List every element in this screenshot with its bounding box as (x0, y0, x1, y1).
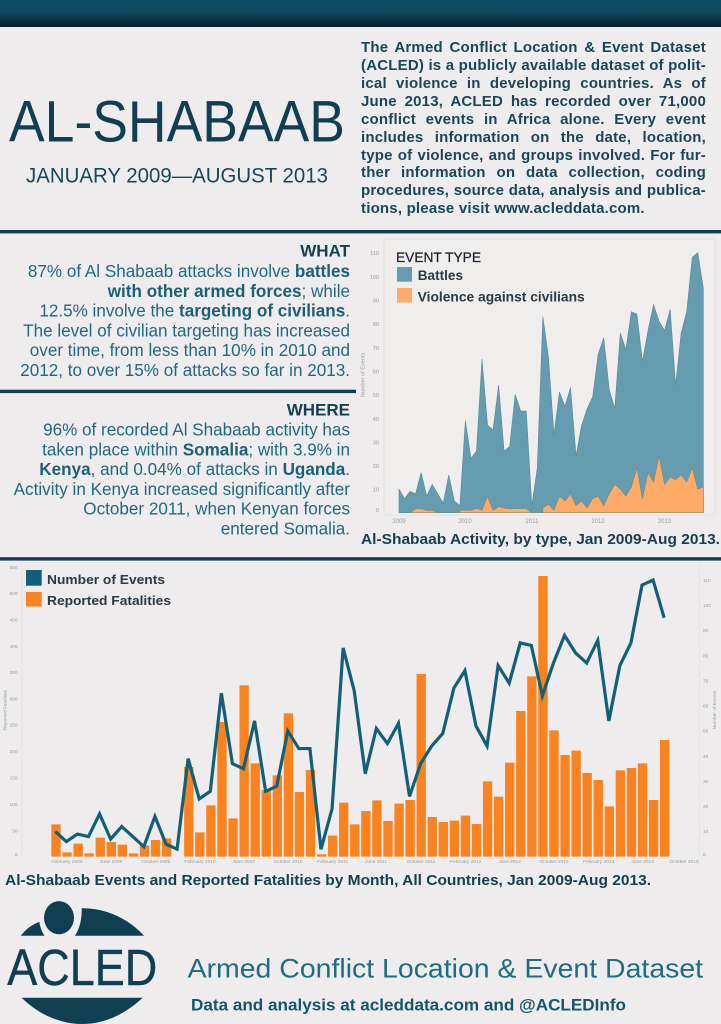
axis labels: 60 (373, 370, 379, 376)
month labels: October 2011 (407, 859, 436, 865)
left axis labels: 100 (9, 802, 18, 808)
area chart: activity by type: 2012 (591, 519, 605, 525)
title: AL-SHABAAB (9, 90, 345, 154)
month labels: June 2009 (100, 859, 123, 865)
axis labels (370, 251, 379, 514)
text block: about ACLED: type of violence, and groups involved. For fur- (361, 147, 706, 164)
left axis labels: 250 (9, 722, 18, 728)
legend: event type (396, 249, 585, 304)
text block: what: 2012, to over 15% of attacks so far in 2013. (20, 361, 350, 380)
axis labels: 110 (370, 251, 379, 257)
month labels: February 2011 (317, 859, 348, 865)
left axis labels: 150 (9, 776, 18, 782)
text block: about ACLED: tions, please visit www.acleddata.com. (361, 200, 645, 217)
left axis labels: 200 (9, 749, 18, 755)
footer: organisation name: Armed Conflict Location & Event Dataset (188, 953, 704, 983)
text block: about ACLED: procedures, source data, analysis and publica- (361, 182, 706, 199)
legend: events and fatalities: Number of Events (47, 572, 165, 587)
text block: where: taken place within Somalia; with 3.9% in (42, 440, 350, 459)
text block: where: Kenya, and 0.04% of attacks in Uganda. (39, 460, 350, 479)
text block: about ACLED (361, 39, 706, 217)
month labels: June 2010 (232, 859, 255, 865)
area chart: activity by type: 2010 (458, 519, 472, 525)
month labels: June 2012 (498, 859, 521, 865)
text block: what (20, 241, 351, 380)
month labels: June 2013 (631, 859, 654, 865)
area chart: activity by type: 2009 (392, 519, 406, 525)
axis labels: 50 (373, 393, 379, 399)
month labels: February 2009 (51, 859, 83, 865)
text block: what: with other armed forces; while (107, 282, 350, 301)
area: violence against civilians (410, 456, 703, 513)
month labels: October 2009 (141, 859, 171, 865)
left axis labels: 550 (9, 565, 18, 571)
area chart: activity by type: Number of Events (360, 352, 366, 397)
area chart: activity by type: 2013 (658, 519, 672, 525)
text block: where: WHERE (287, 401, 350, 420)
month labels: June 2011 (365, 859, 387, 865)
left axis labels: 400 (9, 644, 18, 650)
left axis labels: 50 (12, 828, 18, 834)
header band (0, 0, 721, 27)
text block: what: 87% of Al Shabaab attacks involve battles (28, 262, 350, 281)
left axis labels: 450 (9, 618, 18, 624)
text block: where: Activity in Kenya increased significantly after (14, 480, 350, 499)
legend: events and fatalities (26, 570, 171, 608)
axis labels: 100 (370, 275, 379, 281)
text block: about ACLED: ical violence in developing countries. As of (361, 75, 706, 92)
text block: about ACLED: June 2013, ACLED has recorded over 71,000 (361, 93, 706, 110)
text block: about ACLED: The Armed Conflict Location & Event Dataset (361, 39, 706, 56)
left axis labels: 0 (15, 852, 18, 858)
legend: event type: Violence against civilians (418, 290, 585, 304)
right axis labels: 80 (703, 654, 709, 660)
combo chart: events and fatalities by month: Reported Fatalities (2, 689, 8, 730)
logo: ACLED: ACLED (7, 939, 157, 996)
text block: what: over time, from less than 10% in 2010 and (30, 341, 350, 360)
left axis labels (9, 565, 18, 858)
legend: event type: EVENT TYPE (396, 249, 481, 265)
combo chart: events and fatalities by month (2, 561, 718, 865)
footer: data link: Data and analysis at acleddata.com and @ACLEDInfo (191, 996, 626, 1014)
bars: reported fatalities (56, 576, 665, 857)
axis labels: 90 (373, 298, 379, 304)
right axis labels: 70 (703, 678, 709, 684)
text block: about ACLED: (ACLED) is a publicly available dataset of polit- (361, 57, 706, 74)
text block: about ACLED: conflict events in Africa alone. Every event (361, 111, 706, 128)
right axis labels: 90 (703, 628, 709, 634)
right axis labels: 40 (703, 754, 709, 760)
left axis labels: 350 (9, 670, 18, 676)
text block: what: WHAT (300, 241, 351, 260)
right axis labels: 60 (703, 704, 709, 710)
caption: area chart: Al-Shabaab Activity, by type, Jan 2009-Aug 2013. (361, 532, 720, 548)
month labels: February 2010 (184, 859, 216, 865)
right axis labels: 0 (703, 852, 706, 858)
right axis labels: 100 (703, 603, 711, 609)
text block: where: October 2011, when Kenyan forces (83, 500, 350, 518)
text block: about ACLED: includes information on the date, location, (361, 129, 706, 146)
text block: what: The level of civilian targeting has increased (23, 321, 350, 340)
axis labels: 20 (373, 464, 379, 470)
text block: what: 12.5% involve the targeting of civilians. (39, 302, 350, 321)
caption: combo chart: Al-Shabaab Events and Reported Fatalities by Month, All Countries, Jan 2009-Aug 2013. (5, 872, 651, 889)
right axis labels: 110 (703, 578, 711, 584)
text block: about ACLED: ther information on data collection, coding (361, 164, 706, 181)
text block: where: entered Somalia. (221, 519, 350, 538)
month labels: February 2013 (583, 859, 615, 865)
axis labels: 10 (373, 488, 379, 494)
legend: events and fatalities: Reported Fatalities (47, 593, 171, 608)
axis labels: 40 (373, 417, 379, 423)
axis labels: 80 (373, 322, 379, 328)
right axis labels: 20 (703, 804, 709, 810)
month labels: October 2013 (669, 859, 699, 865)
area: battles (399, 253, 703, 513)
legend: event type: Battles (418, 268, 463, 283)
right axis labels: 30 (703, 779, 709, 785)
area chart: activity by type: 2011 (526, 519, 539, 525)
line: number of events (55, 580, 664, 849)
axis labels: 0 (376, 508, 379, 514)
month labels: October 2012 (539, 859, 569, 865)
combo chart: events and fatalities by month: Number of Events (712, 690, 718, 729)
left axis labels: 300 (9, 696, 18, 702)
left axis labels: 500 (9, 591, 18, 597)
month labels: October 2010 (273, 859, 303, 865)
logo: ACLED (7, 901, 157, 1024)
right axis labels: 10 (703, 829, 709, 835)
axis labels: 30 (373, 440, 379, 446)
area chart: activity by type (360, 239, 715, 525)
month labels (51, 859, 699, 865)
right axis labels: 50 (703, 728, 709, 734)
text block: where: 96% of recorded Al Shabaab activity has (43, 421, 350, 440)
axis labels: 70 (373, 346, 379, 352)
text block: where (14, 401, 350, 538)
month labels: February 2012 (450, 859, 482, 865)
subtitle: date range: JANUARY 2009—AUGUST 2013 (26, 165, 328, 188)
right axis labels (703, 578, 711, 858)
